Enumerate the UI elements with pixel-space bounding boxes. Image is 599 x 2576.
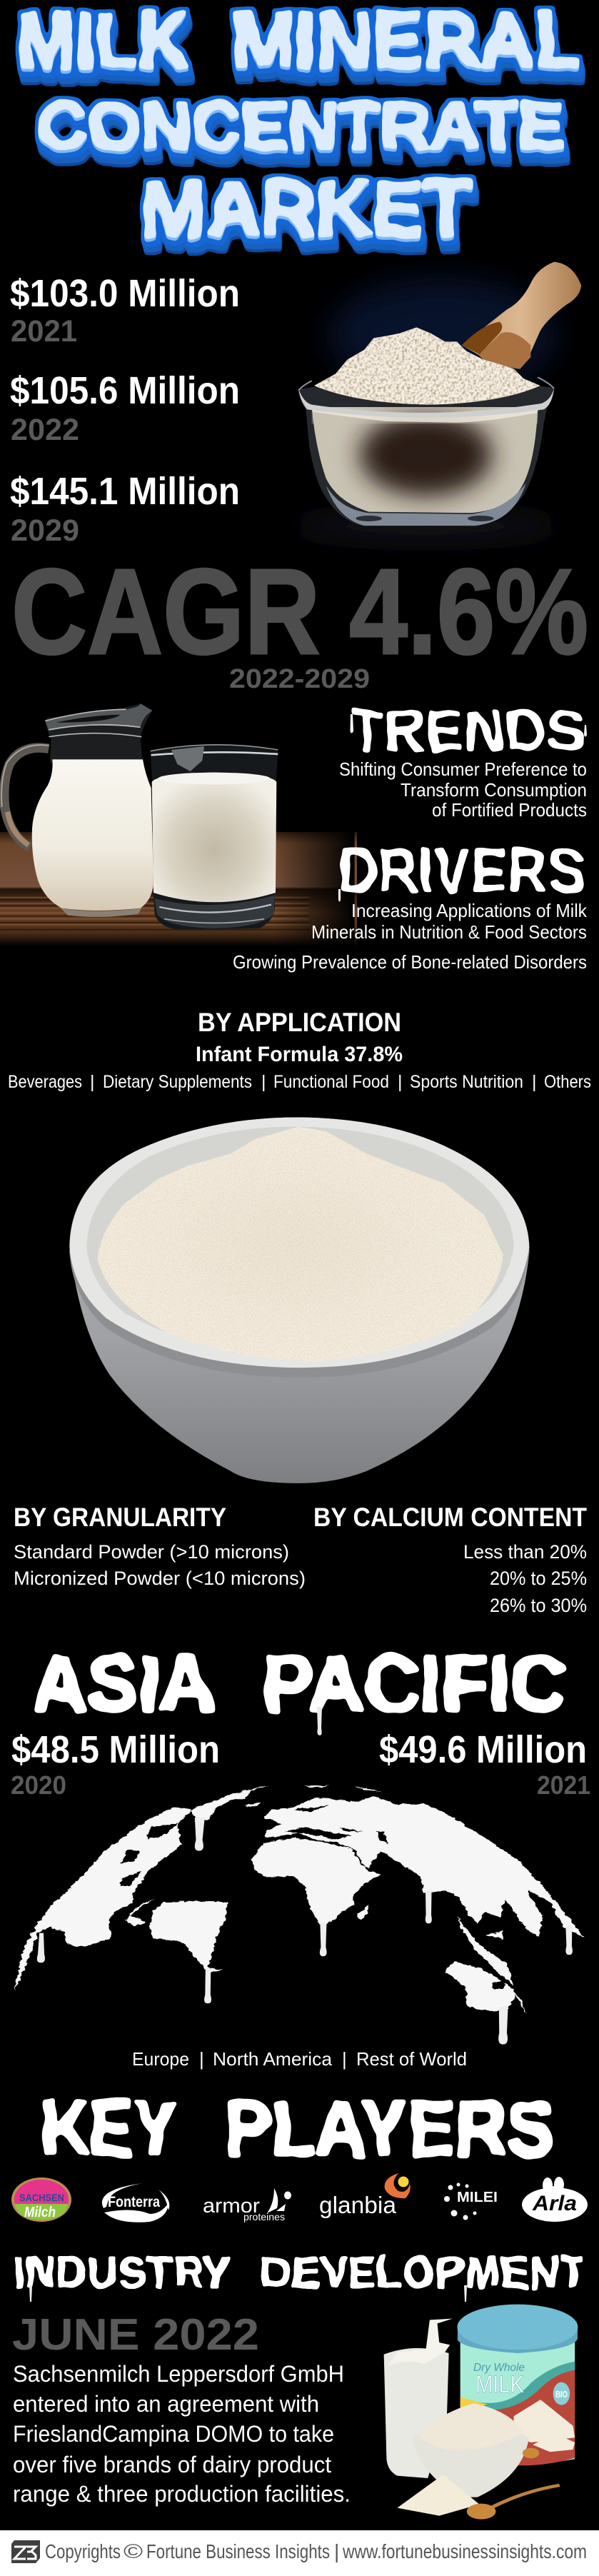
logo: Sachsenmilch: SACHSEN xyxy=(19,2192,64,2203)
footer copyright text: Copyrights xyxy=(45,2540,121,2562)
application segment list: | xyxy=(398,1072,403,1092)
text block: industry development: entered into an agreement with xyxy=(13,2391,319,2417)
regional value 2020: 2020 xyxy=(11,1770,66,1800)
segment: by granularity: BY GRANULARITY xyxy=(14,1503,226,1532)
logo: Fonterra xyxy=(102,2183,169,2222)
image: milk jug and glass on wooden table xyxy=(0,703,357,948)
logo: Arla: Arla xyxy=(532,2192,577,2215)
other regions list xyxy=(132,2048,467,2070)
logo: Fonterra: Fonterra xyxy=(108,2194,160,2210)
map: continents xyxy=(14,1785,585,2014)
stat 2021 xyxy=(10,272,240,349)
heading: key players xyxy=(41,2085,554,2172)
heading: by application: BY APPLICATION xyxy=(198,1008,401,1037)
logo: Armor Proteines xyxy=(203,2188,291,2222)
footer bar xyxy=(0,2530,599,2576)
date: june 2022: JUNE 2022 xyxy=(12,2310,259,2360)
heading: key players: KEY xyxy=(41,2085,178,2172)
image: glass bowl of milk mineral powder with wooden scoop xyxy=(293,262,581,543)
illustration: dry whole milk jar, glass and bowl xyxy=(384,2305,578,2520)
stat 2022 xyxy=(10,369,240,447)
text block: drivers xyxy=(233,900,588,973)
heading: trends: TRENDS xyxy=(349,698,585,763)
footer copyright text: © xyxy=(124,2540,143,2562)
application segment list: | xyxy=(261,1072,266,1092)
footer copyright text xyxy=(45,2540,587,2562)
illustration: dry whole milk jar, glass and bowl: MILK xyxy=(475,2371,524,2398)
other regions list: North America xyxy=(213,2048,333,2070)
CAGR period: 2022-2029 xyxy=(229,664,370,694)
application segment list: Functional Food xyxy=(273,1072,389,1092)
regional value 2021 xyxy=(379,1728,590,1800)
footer copyright text: | xyxy=(334,2540,339,2562)
segment: by calcium content: Less than 20% xyxy=(463,1541,587,1563)
text block: drivers: Increasing Applications of Milk xyxy=(351,900,588,921)
other regions list: Rest of World xyxy=(356,2048,467,2070)
icon: milk drip on pacific xyxy=(317,1707,322,1735)
application segment list: Others xyxy=(544,1072,591,1092)
text block: industry development: range & three production facilities. xyxy=(13,2481,351,2507)
application segment list: | xyxy=(532,1072,537,1092)
title xyxy=(17,0,582,253)
highlighted segment: infant formula: Infant Formula 37.8% xyxy=(196,1043,403,1066)
stat 2029: 2029 xyxy=(11,513,79,548)
logo: Sachsenmilch xyxy=(11,2177,71,2222)
heading: key players: PLAYERS xyxy=(225,2085,554,2172)
logo: Arla xyxy=(522,2177,588,2222)
icon: Fortune Business Insights logo xyxy=(11,2540,40,2563)
icon: milk drips on trends xyxy=(350,714,587,737)
text block: trends xyxy=(339,758,587,821)
segment: by calcium content: 26% to 30% xyxy=(490,1595,587,1616)
other regions list: Europe xyxy=(132,2048,189,2070)
logo: Milei: MILEI xyxy=(457,2190,498,2205)
icon: milk drip on drivers xyxy=(338,889,341,901)
regional value 2020: $48.5 Million xyxy=(11,1728,220,1771)
application segment list: Dietary Supplements xyxy=(103,1072,252,1092)
icon: milk drips on industry development xyxy=(29,2285,467,2302)
stat 2021: $103.0 Million xyxy=(10,272,240,315)
heading: industry development xyxy=(13,2248,585,2302)
regional value 2021: 2021 xyxy=(537,1770,590,1800)
text block: trends: of Fortified Products xyxy=(432,799,587,821)
logo: Armor Proteines: proteines xyxy=(243,2211,285,2222)
regional value 2020 xyxy=(11,1728,220,1800)
stat 2029 xyxy=(10,470,240,548)
logo: Sachsenmilch: Milch xyxy=(24,2205,56,2220)
title: MARKET xyxy=(141,165,470,253)
stat 2029: $145.1 Million xyxy=(10,470,240,513)
heading: industry development: INDUSTRY xyxy=(13,2248,231,2297)
segment: by granularity: Micronized Powder (<10 microns) xyxy=(14,1568,306,1589)
map: inland seas and bays xyxy=(109,1805,508,1989)
illustration: dry whole milk jar, glass and bowl: Dry Whole xyxy=(473,2362,525,2374)
heading: industry development: DEVELOPMENT xyxy=(260,2248,585,2297)
application segment list: | xyxy=(90,1072,94,1092)
other regions list: | xyxy=(199,2048,204,2070)
application segment list xyxy=(8,1072,591,1092)
logo: Glanbia: glanbia xyxy=(319,2192,397,2218)
text block: industry development: over five brands of dairy product xyxy=(13,2452,331,2477)
heading: asia pacific: ASIA xyxy=(33,1639,214,1728)
stat 2021: 2021 xyxy=(11,314,77,349)
text block: industry development: FrieslandCampina DOMO to take xyxy=(13,2421,334,2447)
text block: industry development xyxy=(13,2361,351,2507)
text block: industry development: Sachsenmilch Leppersdorf GmbH xyxy=(13,2361,344,2387)
logo: Milei xyxy=(444,2182,498,2220)
footer copyright text: Fortune Business Insights xyxy=(146,2540,330,2562)
illustration: jar xyxy=(384,2305,578,2520)
segment: by granularity xyxy=(14,1503,306,1589)
heading: asia pacific: PACIFIC xyxy=(262,1639,566,1728)
logo: Glanbia xyxy=(319,2173,411,2218)
segment: by granularity: Standard Powder (>10 microns) xyxy=(14,1541,289,1563)
logo: Armor Proteines: armor xyxy=(203,2195,260,2217)
heading: asia pacific xyxy=(33,1639,566,1735)
application segment list: Beverages xyxy=(8,1072,82,1092)
other regions list: | xyxy=(342,2048,347,2070)
map: dripping milk globe xyxy=(14,1785,585,2045)
map: milk drips xyxy=(37,1818,573,2045)
image: white bowl of powder xyxy=(69,1117,529,1483)
segment: by calcium content: 20% to 25% xyxy=(490,1568,587,1589)
stat 2022: 2022 xyxy=(11,413,79,447)
illustration: dry whole milk jar, glass and bowl: BIO xyxy=(555,2389,568,2400)
application segment list: Sports Nutrition xyxy=(410,1072,523,1092)
segment: by calcium content xyxy=(313,1503,587,1616)
stat 2022: $105.6 Million xyxy=(10,369,240,412)
title: CONCENTRATE xyxy=(36,88,565,163)
text block: trends: Transform Consumption xyxy=(401,779,587,801)
